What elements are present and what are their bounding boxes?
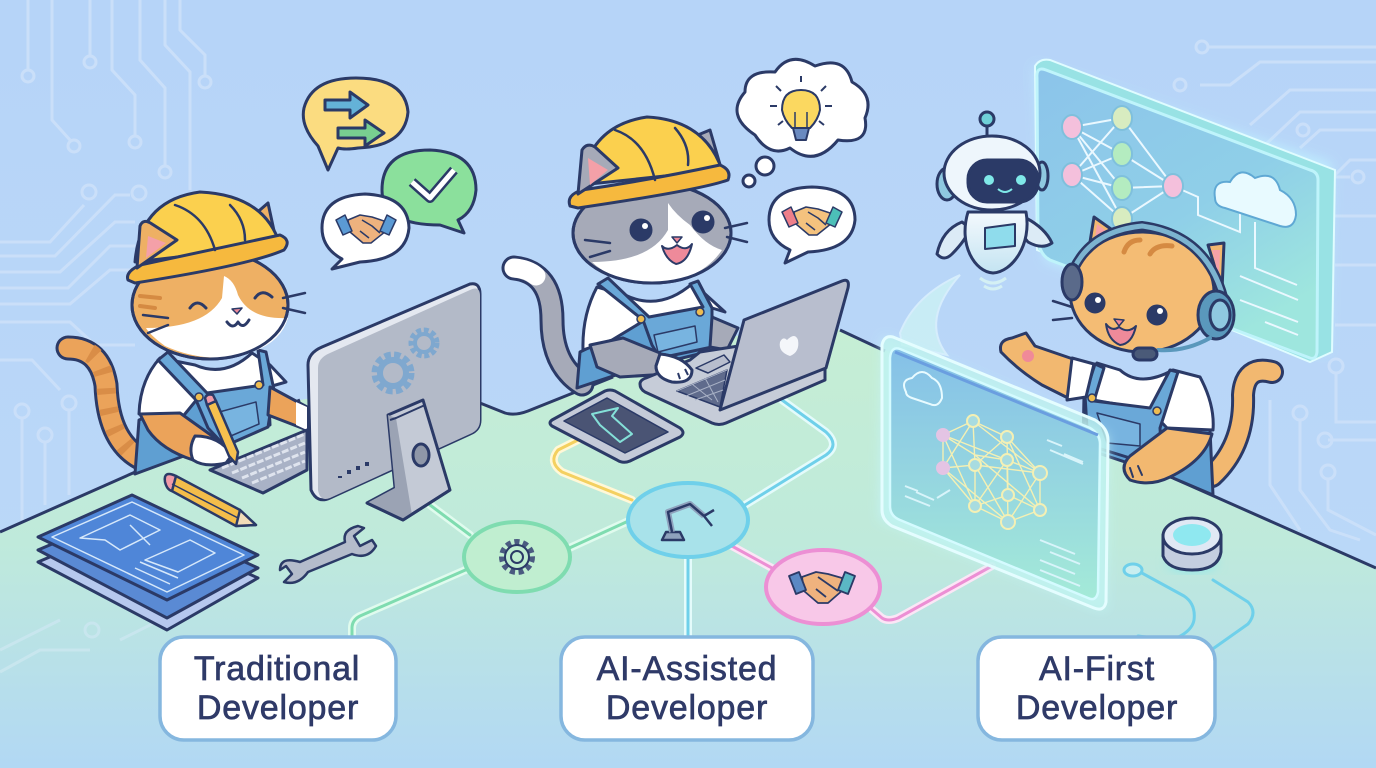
cyan trace	[688, 400, 833, 636]
left ear	[578, 145, 618, 194]
head	[132, 251, 305, 359]
robot assistant	[937, 112, 1052, 289]
overalls	[1083, 395, 1213, 495]
wrench	[280, 526, 376, 583]
tail: grey cat	[514, 268, 582, 384]
label: AI-First Developer: AI-First	[1039, 650, 1155, 688]
right ear	[693, 130, 721, 168]
small cloud	[904, 372, 942, 405]
raised arm	[1000, 333, 1094, 400]
label: AI-Assisted Developer	[561, 637, 813, 740]
pencil in hand	[205, 394, 238, 464]
left arm	[590, 338, 690, 381]
network	[1072, 118, 1298, 335]
shirt	[583, 283, 725, 350]
tail: orange cat	[68, 348, 140, 458]
label: Traditional Developer: Developer	[197, 689, 359, 727]
hat	[128, 192, 287, 283]
background circuit traces right	[1174, 41, 1376, 540]
node: handshake	[766, 550, 880, 624]
robot arms	[937, 222, 970, 258]
label: AI-First Developer	[978, 637, 1215, 740]
node: gear	[464, 522, 570, 592]
shirt	[1093, 363, 1213, 430]
keyboard	[210, 430, 307, 493]
front hologram panel	[880, 337, 1108, 610]
pink trace	[730, 545, 992, 620]
left arm	[140, 413, 232, 465]
headset cat	[1000, 217, 1234, 495]
gears	[376, 331, 436, 390]
resting arm	[1124, 428, 1212, 483]
head	[1053, 232, 1214, 352]
green trace	[352, 505, 635, 636]
table surface	[0, 318, 1376, 768]
laptop	[640, 280, 848, 424]
speech bubble: check	[382, 150, 476, 233]
bib and straps	[1085, 364, 1178, 460]
left ear	[137, 221, 177, 268]
yellow trace	[554, 438, 632, 500]
head	[573, 183, 747, 283]
lightbulb	[770, 76, 832, 140]
ear left	[1090, 217, 1118, 242]
tablet	[550, 390, 683, 462]
cloud	[1215, 172, 1296, 227]
label: Traditional Developer: Traditional	[194, 650, 360, 688]
speech bubble: handshake 1	[322, 194, 409, 269]
ports	[340, 462, 367, 478]
text lines	[905, 440, 1083, 586]
robot body	[965, 212, 1027, 273]
ear right	[1208, 243, 1224, 290]
blueprints	[38, 495, 258, 630]
grey cat paw over laptop	[656, 354, 692, 382]
headset	[1062, 226, 1234, 360]
wireless device	[1163, 518, 1221, 570]
thought cloud	[737, 59, 868, 187]
stand	[367, 400, 450, 520]
table circuit traces	[0, 610, 180, 672]
bib and straps	[158, 350, 274, 446]
right arm	[710, 317, 738, 350]
glow swoosh	[900, 275, 960, 355]
tail: headset cat	[1212, 371, 1272, 476]
label: AI-First Developer: Developer	[1016, 689, 1178, 727]
overalls	[135, 385, 270, 474]
glowing connection lines	[352, 400, 1253, 665]
monitor	[308, 284, 480, 520]
network	[943, 421, 1040, 522]
background circuit traces left	[0, 0, 211, 520]
label: AI-Assisted Developer: AI-Assisted	[597, 650, 777, 688]
label: Traditional Developer	[160, 637, 396, 740]
hat	[569, 117, 729, 208]
robot head	[937, 168, 957, 200]
shirt	[139, 353, 286, 420]
right arm	[268, 387, 307, 430]
right ear	[253, 203, 276, 240]
pencil	[165, 474, 256, 526]
back hologram panel	[1035, 60, 1335, 362]
right cyan traces	[1124, 564, 1253, 665]
orange cat	[128, 192, 307, 474]
speech bubble: handshake 2	[769, 187, 855, 263]
label: AI-Assisted Developer: Developer	[606, 689, 768, 727]
bib and straps	[598, 278, 712, 358]
grey cat	[569, 117, 747, 388]
node: robot arm	[628, 483, 748, 557]
overalls	[577, 315, 715, 388]
speech bubble: arrows	[303, 78, 408, 170]
